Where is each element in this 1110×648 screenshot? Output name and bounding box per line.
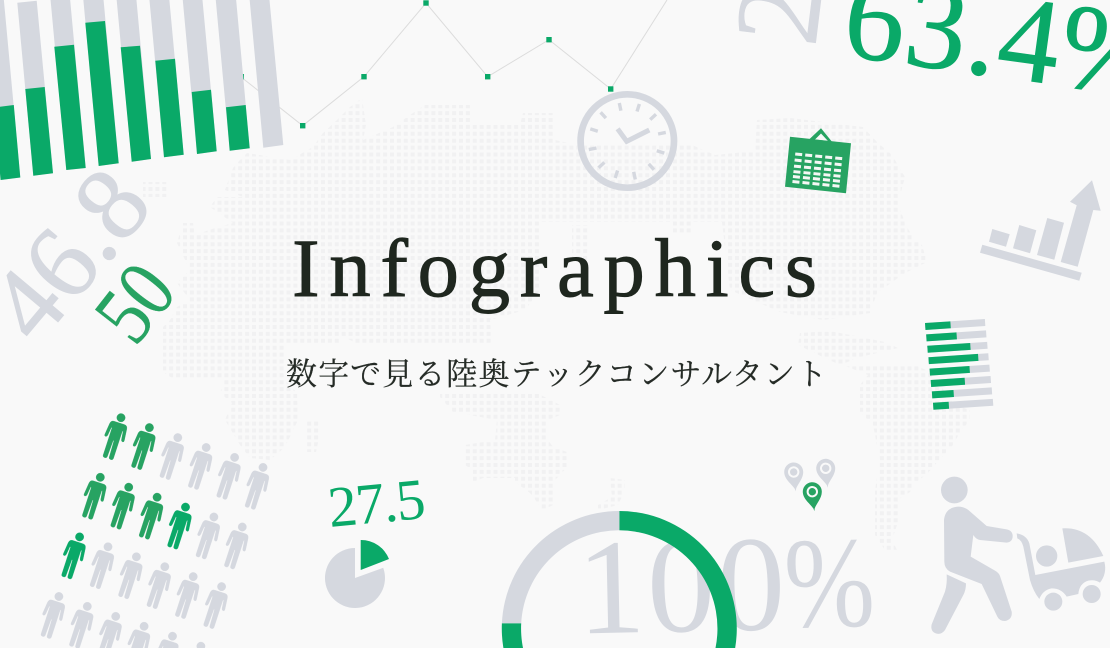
donut chart: [502, 511, 737, 648]
title: Infographics: [292, 222, 817, 314]
icon: growth chart with arrow: [980, 180, 1101, 281]
bar chart: slanted columns: [0, 0, 283, 180]
icon: people pictogram: [36, 411, 274, 648]
dotted world map: [143, 98, 970, 550]
number: 27.5: 27.5: [325, 466, 427, 540]
horizontal bar chart: [925, 319, 993, 410]
subtitle: 数字で見る陸奥テックコンサルタント: [286, 357, 827, 392]
number: 50: 50: [76, 246, 193, 359]
icon: map pins: [783, 458, 837, 512]
pie chart: [325, 540, 389, 608]
icon: person pushing stroller: [931, 477, 1105, 634]
number: 100%: [576, 507, 876, 648]
icon: calendar: [785, 128, 851, 193]
icon: clock: [581, 94, 674, 188]
line chart: [238, 0, 667, 128]
